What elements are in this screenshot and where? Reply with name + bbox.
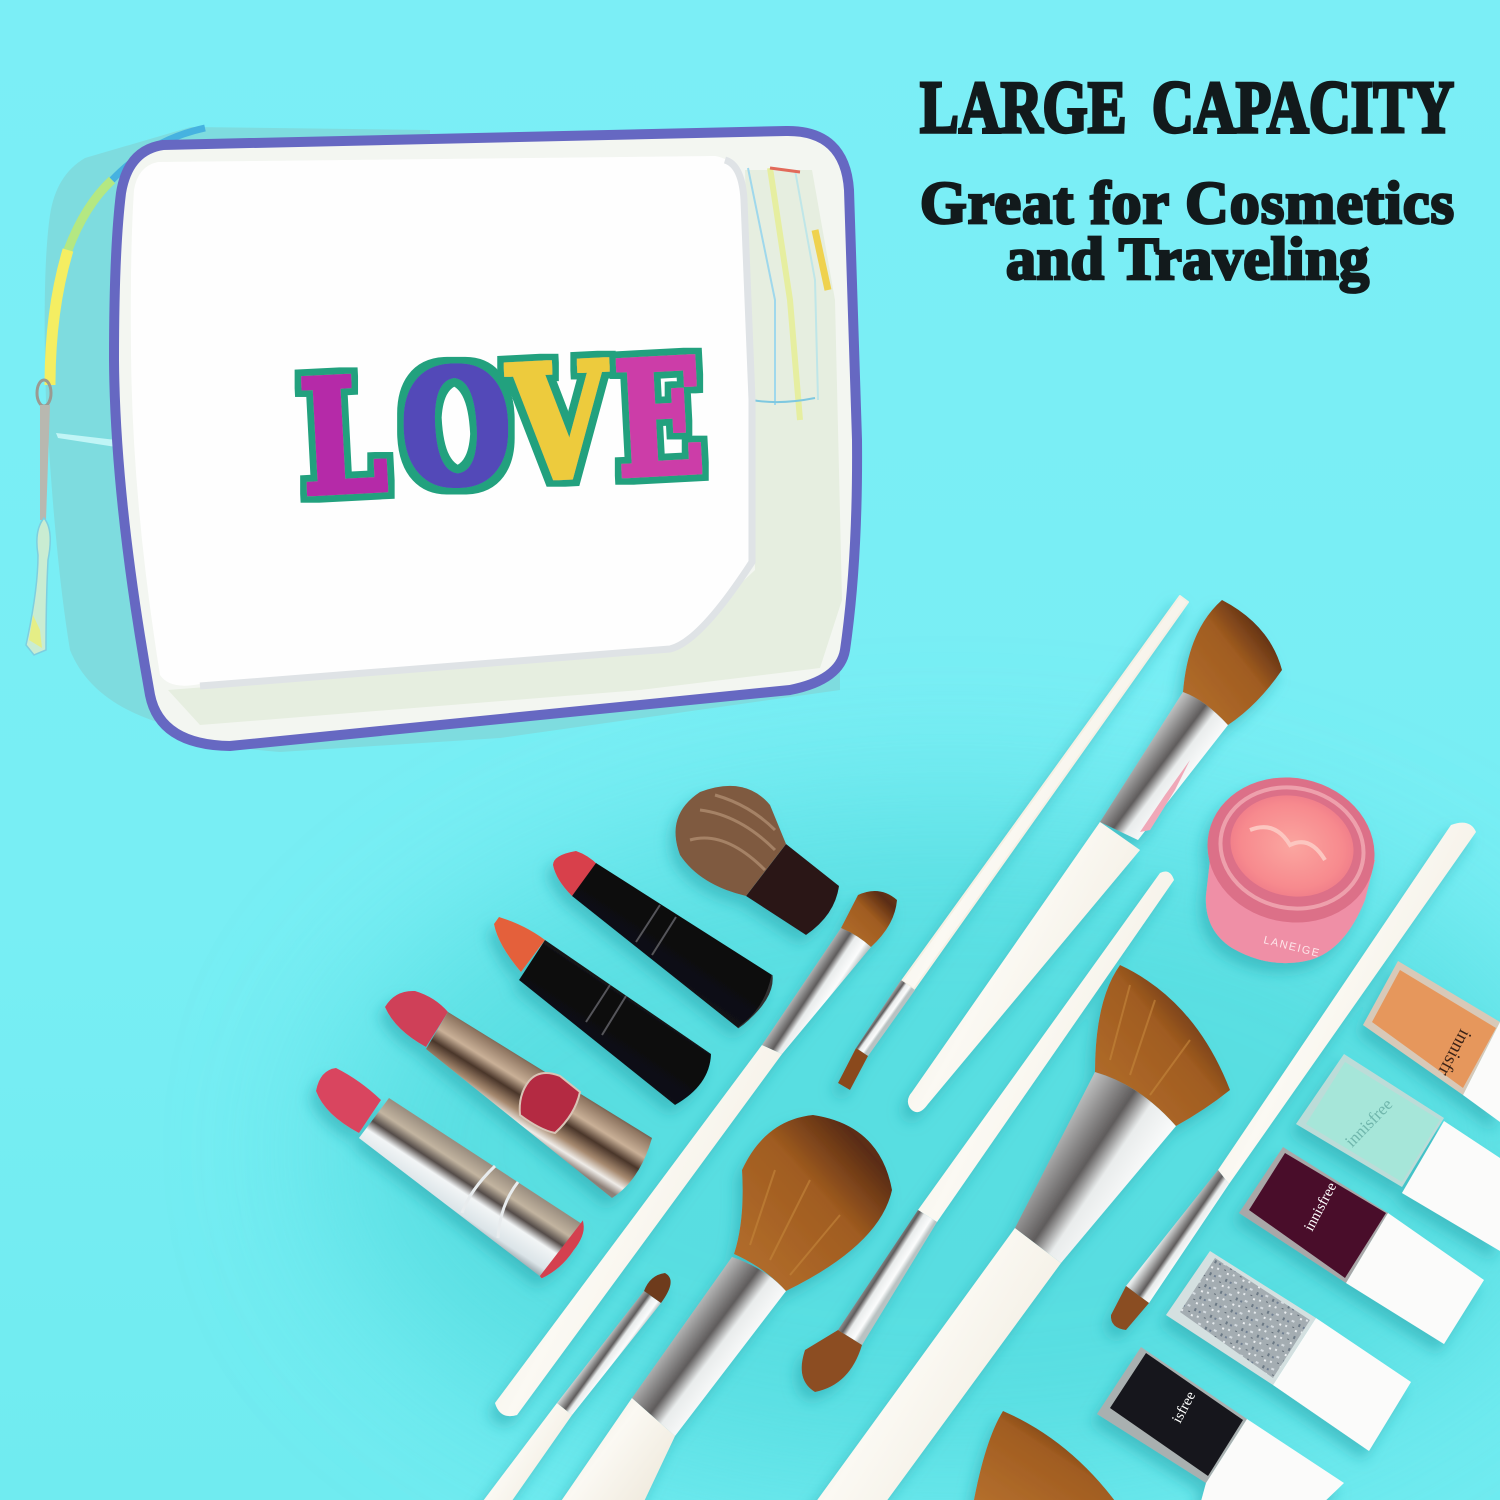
lip balm jar bbox=[1194, 762, 1388, 963]
subtitle: great for cosmetics and traveling bbox=[920, 170, 1454, 292]
letter E: E bbox=[611, 325, 708, 514]
bag body bbox=[45, 127, 840, 752]
purple frame bbox=[114, 131, 857, 746]
brush: center long handle bbox=[802, 872, 1174, 1392]
kabuki brush bbox=[676, 786, 839, 935]
brush: angled large bbox=[908, 600, 1282, 1112]
brush: small eye bottom bbox=[480, 1273, 671, 1500]
brush: small flat long handle bbox=[838, 596, 1188, 1090]
nail polish: glitter bbox=[1166, 1251, 1411, 1451]
zipper bbox=[50, 128, 205, 385]
white insert panel bbox=[131, 156, 752, 686]
brush: eyeshadow long handle bbox=[495, 891, 897, 1416]
cosmetic bag bbox=[26, 127, 857, 752]
jar label: LANEIGE bbox=[1262, 934, 1322, 960]
letter V: V bbox=[504, 327, 616, 518]
lipstick gem bbox=[520, 1073, 580, 1133]
side seam bbox=[56, 433, 116, 447]
brush: big fan bbox=[810, 965, 1230, 1500]
polish brand label: innisfr bbox=[1433, 1026, 1475, 1080]
zipper pull bbox=[26, 380, 51, 655]
polish brand label: isfree bbox=[1169, 1389, 1199, 1426]
subtitle: great for cosmetics and traveling: and Traveling bbox=[1006, 226, 1369, 292]
lipstick: silver bbox=[316, 1068, 582, 1277]
brush: right long handle bbox=[1111, 823, 1476, 1330]
brush: powder bbox=[555, 1115, 892, 1500]
brush: bottom fan bbox=[973, 1411, 1118, 1500]
letter L: L bbox=[296, 342, 390, 532]
lipstick: bronze with gem bbox=[385, 991, 652, 1198]
subtitle: great for cosmetics and traveling: Great for Cosmetics bbox=[920, 170, 1454, 236]
lipstick: orange black bbox=[494, 917, 711, 1105]
clear window bbox=[114, 131, 857, 746]
polish brand label: innisfree bbox=[1341, 1095, 1396, 1151]
polish brand label: innisfree bbox=[1301, 1180, 1340, 1234]
mesh edge bbox=[200, 160, 752, 686]
letter O: O bbox=[396, 332, 516, 523]
lipstick: black top bbox=[553, 851, 772, 1028]
pouch liner bbox=[168, 170, 842, 725]
nail polish: plum bbox=[1239, 1147, 1484, 1344]
nail polish: orange bbox=[1363, 961, 1500, 1122]
inner stripes bbox=[748, 168, 828, 420]
nail polish: mint bbox=[1296, 1054, 1500, 1251]
makeup items bbox=[316, 596, 1500, 1500]
nail polish: black bbox=[1097, 1347, 1344, 1500]
love patch bbox=[296, 325, 708, 532]
